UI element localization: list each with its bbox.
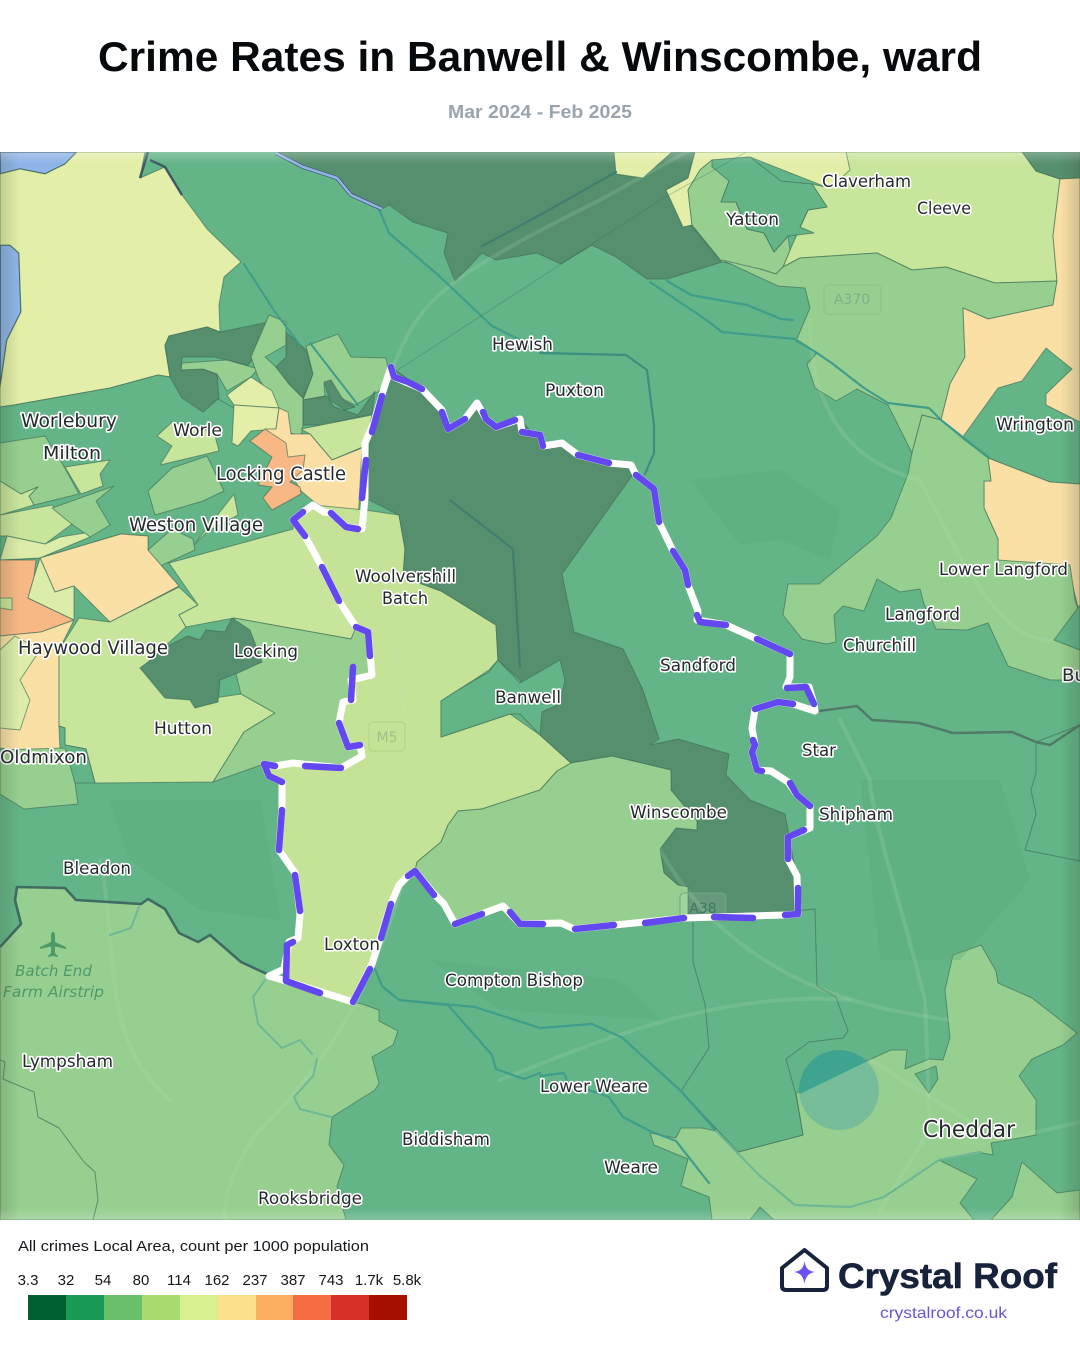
place labels: Hutton [154,719,212,739]
boundary: Bleadon hill [0,887,267,974]
airstrip label: Farm Airstrip [3,983,104,1001]
road shield: M5 [369,722,405,751]
roads [100,150,1080,1220]
boundary: coast north [140,152,182,195]
legend scale values: 162 [204,1272,230,1289]
place labels: Puxton [545,381,604,401]
legend scale values: 114 [167,1272,191,1289]
reservoir [799,1050,879,1130]
place labels [0,172,1080,1209]
legend scale values: 32 [58,1272,74,1289]
airstrip label: Batch End [15,962,92,980]
road shield: A370 [824,285,881,314]
ward interior [264,505,571,1002]
west: Weston-super-Mare neighbourhoods [0,374,293,564]
icon: house with star [782,1250,827,1290]
place labels: Biddisham [402,1130,490,1150]
logo wordmark: Crystal Roof [838,1257,1057,1296]
legend scale values: 237 [242,1272,268,1289]
place labels: Hewish [492,335,553,355]
place labels: Worle [173,421,222,441]
road shield: A38 [680,893,726,921]
legend colour ramp [28,1295,407,1320]
airstrip label [3,962,104,1001]
logo url: crystalroof.co.uk [880,1305,1008,1322]
legend scale values [18,1272,422,1289]
icon: airfield plane [40,932,66,957]
place labels: Lower Langford [939,560,1068,580]
place labels: Shipham [819,805,893,825]
faint land-cover patches [952,948,970,960]
ward boundary: Banwell & Winscombe [264,367,815,1002]
road shield: A370: A370 [834,292,870,308]
place labels: Compton Bishop [445,971,583,991]
road shield: M5: M5 [376,730,398,746]
map panel [0,150,1080,1220]
place labels: Locking Castle [216,463,346,485]
river: Severn tributary [276,153,382,209]
place labels: Cheddar [923,1117,1016,1143]
choropleth regions: coastal and north-west [0,152,1080,1220]
legend title: All crimes Local Area, count per 1000 population [18,1238,369,1255]
place labels: Haywood Village [18,637,168,659]
place labels: Langford [885,605,960,625]
road shield: A38: A38 [689,901,717,917]
logo: Crystal Roof [782,1250,1057,1322]
place labels: Loxton [324,935,380,955]
place labels: Bleadon [63,859,131,879]
place labels: Weare [604,1158,658,1178]
title: Crime Rates in Banwell & Winscombe, ward [98,33,982,80]
place labels: Wrington [996,415,1074,435]
place labels: Milton [43,443,101,464]
place labels: Churchill [843,636,916,656]
rivers [0,150,988,1220]
map edge shading [0,152,1080,1220]
legend scale values: 3.3 [18,1272,38,1289]
place labels: Banwell [495,688,561,708]
sea [0,152,77,388]
place labels: Batch [382,589,428,609]
legend scale values: 387 [280,1272,306,1289]
boundary: Mendip line [819,706,1080,745]
place labels: Sandford [660,656,736,676]
place labels: Oldmixon [0,747,87,768]
legend scale values: 1.7k [355,1272,384,1289]
place labels: Locking [234,642,298,662]
place labels: Woolvershill [355,567,456,587]
south: Bleadon, Lympsham, Cheddar [0,887,398,1220]
place labels: Lympsham [22,1052,113,1072]
place labels: Cleeve [917,199,971,219]
legend scale values: 5.8k [393,1272,422,1289]
legend scale values: 54 [95,1272,111,1289]
place labels: Lower Weare [540,1077,648,1097]
place labels: Rooksbridge [258,1189,362,1209]
subtitle: date range: Mar 2024 - Feb 2025 [448,102,632,122]
place labels: Worlebury [21,410,117,432]
place labels: Yatton [725,210,779,230]
legend scale values: 80 [133,1272,149,1289]
legend [18,1238,422,1320]
place labels: Claverham [822,172,911,192]
legend scale values: 743 [318,1272,344,1289]
place labels: Winscombe [630,803,727,823]
place labels: Weston Village [129,514,263,536]
place labels: Star [802,741,836,761]
